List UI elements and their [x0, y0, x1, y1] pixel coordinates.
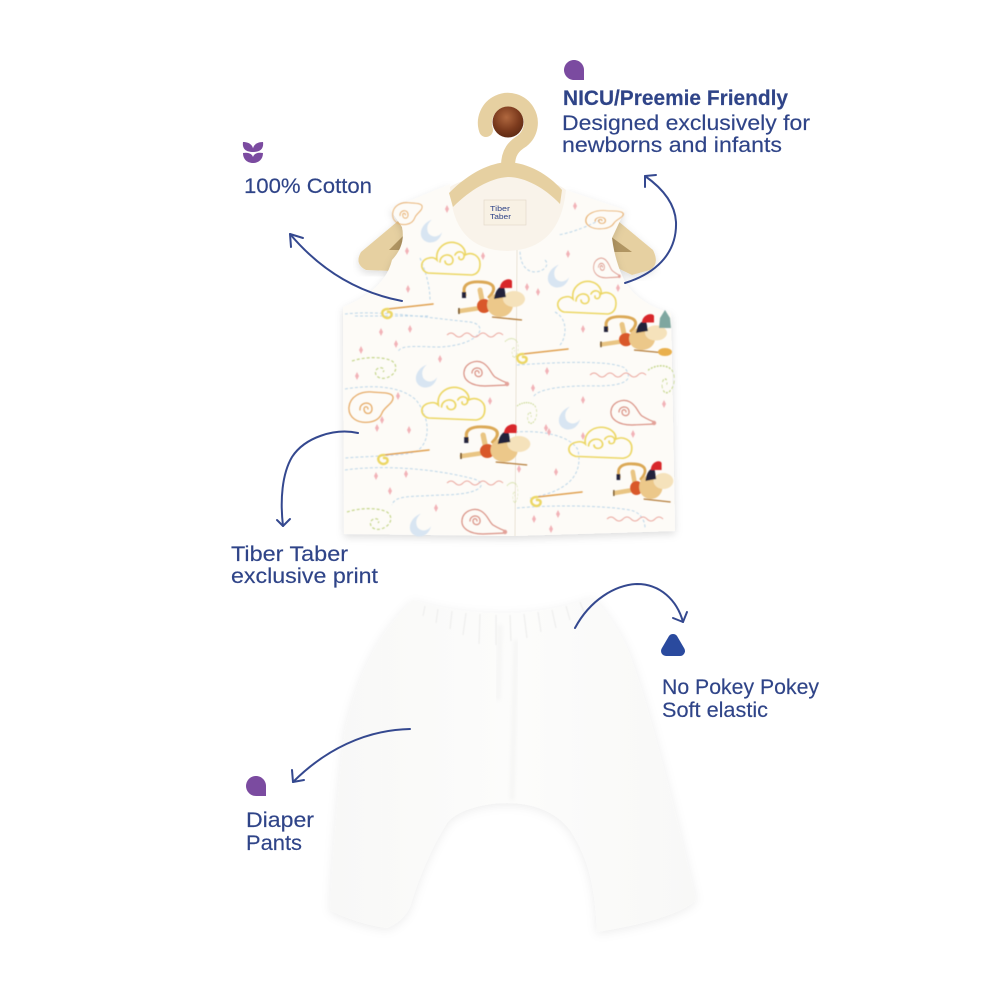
arrow: to exclusive print [277, 432, 358, 526]
label: Pants [246, 832, 302, 855]
red snails [464, 361, 509, 386]
pants fold shading [498, 625, 516, 800]
print pattern [345, 202, 674, 538]
label: 100% Cotton [244, 175, 372, 198]
moons [414, 363, 439, 389]
hanger left arm [358, 216, 412, 271]
brooms [382, 304, 433, 318]
description [562, 112, 810, 157]
hanger hook [485, 100, 531, 166]
wooden knob [492, 106, 524, 138]
hanger [358, 216, 656, 275]
neck label: Taber [490, 214, 512, 221]
hanger right notch [610, 236, 632, 252]
label [246, 809, 314, 855]
yellow clouds [422, 242, 480, 275]
wavy lines [447, 333, 503, 337]
label: No Pokey Pokey [662, 676, 819, 699]
hook ring [485, 100, 531, 166]
arrow: to 100% Cotton [290, 234, 402, 301]
placket seam [515, 250, 517, 536]
inner neck back [450, 176, 566, 251]
neck label [484, 200, 526, 225]
arrow: to No Pokey Pokey [575, 584, 687, 628]
vest body [343, 184, 675, 536]
label [662, 676, 819, 722]
callout: exclusive print: Tiber Taber [231, 543, 348, 566]
description: newborns and infants [562, 134, 782, 157]
arrow: to NICU/Preemie [625, 175, 676, 283]
waistband gathers [423, 602, 584, 645]
hanger right arm [605, 216, 656, 275]
icon: purple drop [564, 60, 584, 80]
neck label: Tiber [490, 206, 511, 213]
green swirls [352, 358, 396, 378]
orange swirls [349, 392, 393, 422]
heading: NICU/Preemie Friendly [563, 87, 788, 110]
icon: leaves [243, 142, 263, 163]
monkeys [459, 279, 525, 320]
label: Soft elastic [662, 699, 768, 722]
callout: Diaper Pants [246, 776, 314, 855]
callout: exclusive print: exclusive print [231, 565, 378, 588]
callout: exclusive print [231, 543, 378, 588]
label: Diaper [246, 809, 314, 832]
arrow: to Diaper Pants [292, 729, 410, 782]
pink diamonds [355, 202, 666, 533]
blue dashed lines [345, 220, 645, 528]
pants body [330, 597, 696, 932]
vest [343, 162, 675, 538]
callout: 100% Cotton [243, 142, 372, 198]
hanger left notch [389, 236, 406, 250]
small cap accent [659, 310, 671, 328]
icon: purple drop [246, 776, 266, 796]
hanger shoulder arch [449, 162, 562, 207]
description: Designed exclusively for [562, 112, 810, 135]
icon: blue rounded triangle [666, 639, 680, 651]
callout: No Pokey Pokey [662, 639, 819, 722]
pants [330, 597, 696, 932]
callout: NICU/Preemie Friendly [562, 60, 810, 157]
